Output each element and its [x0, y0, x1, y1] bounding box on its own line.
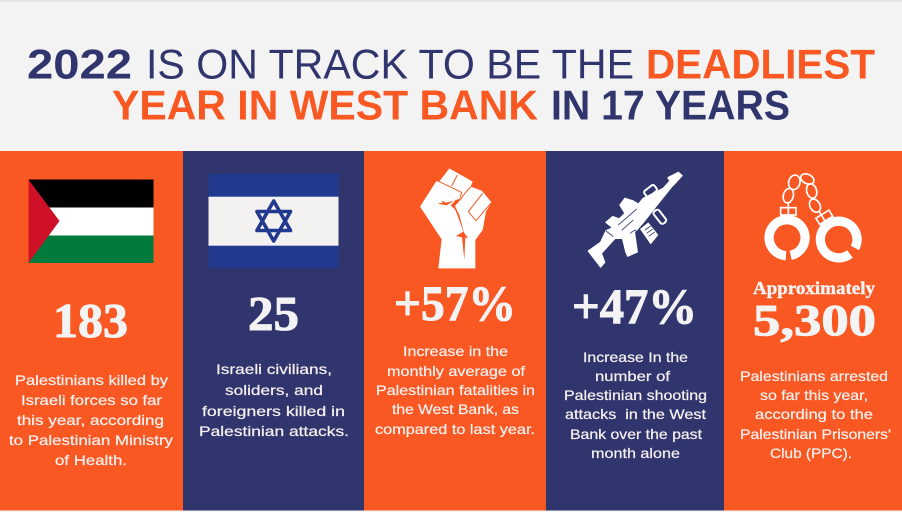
description: Palestinians arrested: Palestinian Prisoners' — [740, 426, 891, 442]
description: monthly fatalities increase: the West Bank, as — [392, 401, 519, 417]
description: shooting attacks increase: Increase In the — [583, 349, 688, 365]
icon: Israeli flag — [208, 174, 338, 268]
description: shooting attacks increase: Bank over the past — [570, 426, 702, 442]
title — [27, 40, 875, 128]
icon: handcuffs — [769, 172, 857, 258]
description: monthly fatalities increase: monthly average of — [387, 363, 525, 379]
description: Palestinians arrested: Club (PPC). — [770, 445, 852, 461]
description: Israelis killed: Israeli civilians, — [216, 361, 332, 377]
description: Israelis killed: Palestinian attacks. — [199, 423, 349, 439]
description: Palestinians killed — [9, 372, 173, 468]
description: Palestinians arrested: so far this year, — [760, 387, 868, 403]
stat: 183: 183 — [53, 293, 128, 348]
description: shooting attacks increase: number of — [595, 368, 670, 384]
stat: 25: 25 — [248, 286, 299, 341]
panel: shooting attacks increase — [546, 151, 724, 510]
stat: Approximately 5,300: 5,300 — [753, 296, 876, 345]
panel: Israelis killed — [183, 151, 364, 510]
stat: Approximately 5,300 — [753, 278, 876, 345]
panel: Palestinians killed — [0, 151, 183, 510]
title: YEAR IN WEST BANK — [112, 82, 538, 128]
description: monthly fatalities increase — [375, 343, 535, 437]
description: shooting attacks increase: Palestinian shooting — [564, 387, 707, 403]
panel: Palestinians arrested — [724, 151, 902, 510]
description: Israelis killed — [199, 361, 349, 439]
title: IS ON TRACK TO BE THE — [146, 40, 634, 88]
icon: raised fist — [420, 168, 492, 268]
icon: Palestinian flag — [28, 180, 154, 263]
description: Palestinians arrested: according to the — [755, 406, 873, 422]
icon: assault rifle — [588, 172, 682, 267]
title: DEADLIEST — [646, 40, 875, 88]
stat: +57%: +57% — [394, 275, 516, 331]
stat: Approximately 5,300: Approximately — [753, 278, 875, 298]
description: Palestinians killed: Palestinians killed by — [15, 372, 168, 388]
description: monthly fatalities increase: compared to last year. — [375, 421, 535, 437]
description: Palestinians killed: Israeli forces so far — [21, 392, 162, 408]
description: Palestinians arrested — [740, 368, 891, 461]
description: shooting attacks increase — [564, 349, 707, 461]
description: shooting attacks increase: attacks in the West — [565, 406, 706, 422]
description: Palestinians killed: of Health. — [55, 452, 127, 468]
description: Palestinians killed: to Palestinian Ministry — [9, 432, 173, 448]
description: Palestinians killed: this year, according — [17, 412, 164, 428]
title: 2022 — [27, 40, 132, 88]
description: shooting attacks increase: month alone — [591, 445, 680, 461]
title: IN 17 YEARS — [551, 82, 790, 128]
stat: +47%: +47% — [572, 278, 697, 334]
panel: monthly fatalities increase — [364, 151, 546, 510]
description: Israelis killed: soliders, and — [225, 382, 323, 398]
description: Israelis killed: foreigners killed in — [202, 403, 345, 419]
description: Palestinians arrested: Palestinians arrested — [740, 368, 888, 384]
description: monthly fatalities increase: Increase in the — [403, 343, 508, 359]
description: monthly fatalities increase: Palestinian fatalities in — [376, 382, 535, 398]
